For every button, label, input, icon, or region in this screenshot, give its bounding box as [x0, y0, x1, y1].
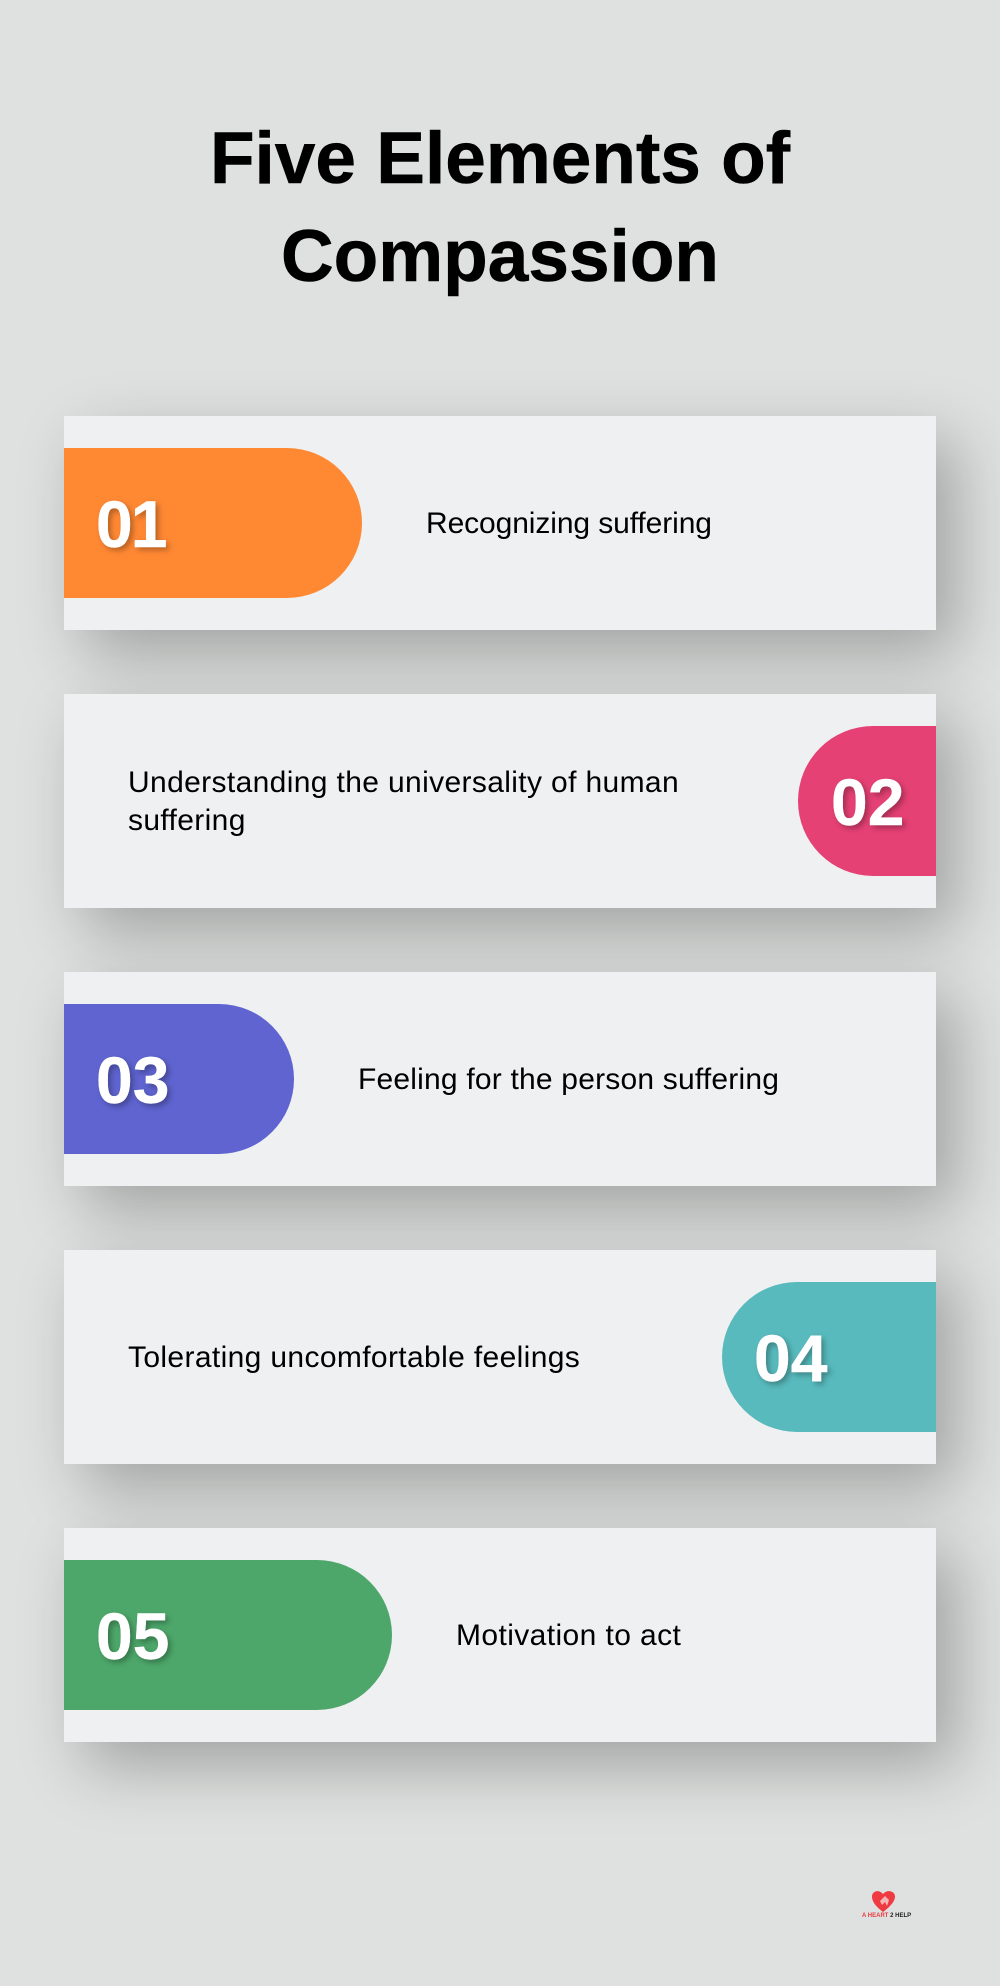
- number badge 02: 02: [831, 765, 904, 839]
- text: feeling for the person: Feeling for the person suffering: [358, 1063, 779, 1096]
- text: understanding universality: suffering: [128, 804, 246, 837]
- title: Compassion: [281, 216, 719, 297]
- number badge 01: [64, 448, 362, 598]
- text: tolerating feelings: Tolerating uncomfortable feelings: [128, 1341, 580, 1374]
- logo name: A HEART 2 HELP: [862, 1913, 911, 1919]
- panel: element 03: [64, 972, 936, 1186]
- panel: element 01: [64, 416, 936, 630]
- number badge 03: 03: [96, 1043, 169, 1117]
- number badge 05: 05: [96, 1599, 169, 1673]
- panel: element 04: [64, 1250, 936, 1464]
- text: recognizing suffering: Recognizing suffering: [426, 507, 712, 540]
- number badge 04: 04: [754, 1321, 827, 1395]
- text: understanding universality: Understanding the universality of human: [128, 766, 679, 799]
- text: understanding universality: [128, 766, 679, 837]
- number badge 03: [64, 1004, 294, 1154]
- text: motivation to act: Motivation to act: [456, 1619, 681, 1652]
- number badge 04: [722, 1282, 936, 1432]
- title: [210, 118, 790, 297]
- title: Five Elements of: [210, 118, 790, 199]
- number badge 02: [798, 726, 936, 876]
- number badge 01: 01: [96, 487, 165, 561]
- logo: [862, 1891, 911, 1919]
- panel: element 02: [64, 694, 936, 908]
- icon: heart: [872, 1891, 895, 1912]
- panel: element 05: [64, 1528, 936, 1742]
- number badge 05: [64, 1560, 392, 1710]
